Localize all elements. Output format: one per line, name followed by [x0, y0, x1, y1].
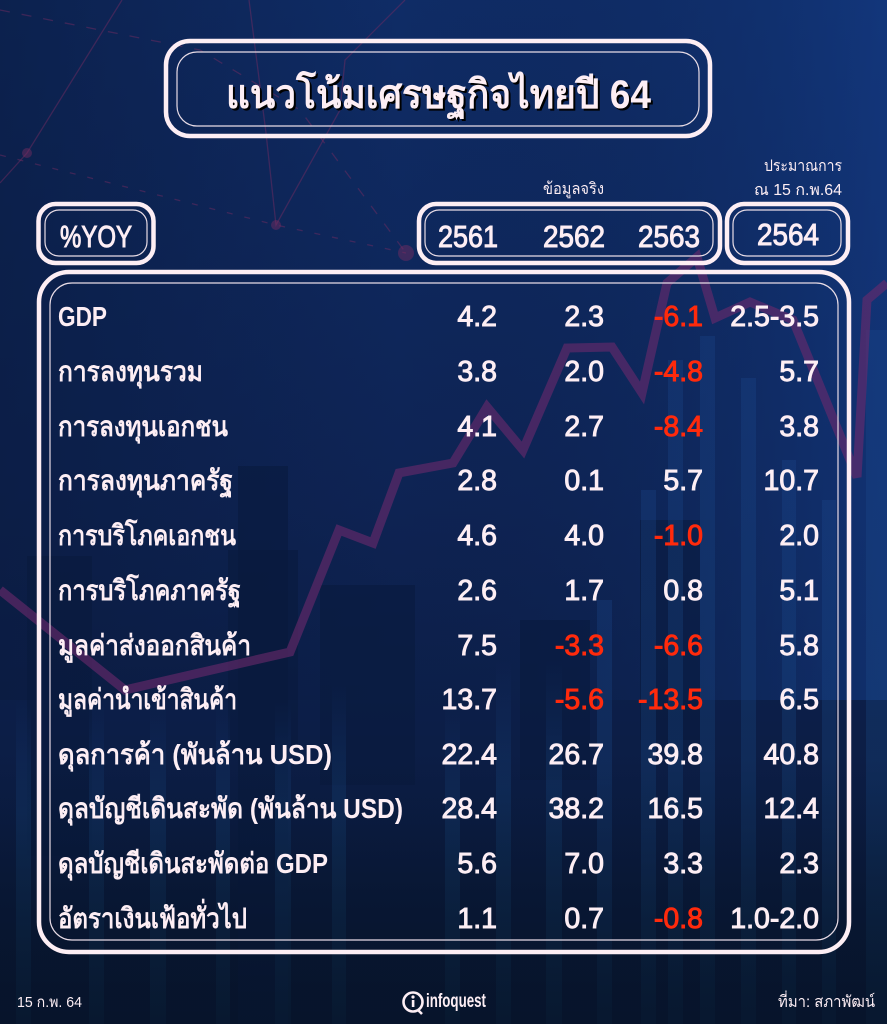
- row: trade balance: 39.8: [648, 739, 703, 771]
- row: GDP: -6.1: [654, 301, 703, 333]
- row: trade balance: ดุลการค้า (พันล้าน USD): [58, 739, 332, 772]
- footer date: 15 ก.พ. 64: [17, 994, 82, 1011]
- row: trade balance: 26.7: [549, 739, 604, 771]
- label: forecast: ประมาณการ: [764, 158, 842, 175]
- row: headline inflation: -0.8: [654, 903, 703, 935]
- row: headline inflation: [58, 898, 819, 935]
- header: forecast year: [727, 204, 848, 263]
- row: private consumption: 4.6: [457, 520, 497, 552]
- title text: แนวโน้มเศรษฐกิจไทยปี 64: [226, 71, 652, 121]
- row: current account to GDP: 3.3: [663, 848, 703, 880]
- row: GDP: 2.3: [564, 301, 604, 333]
- source: ที่มา: สภาพัฒน์: [778, 990, 875, 1011]
- row: public consumption: [58, 573, 819, 609]
- row: GDP: [58, 301, 819, 333]
- row: private investment: 4.1: [457, 411, 497, 443]
- icon: magnifier i: [404, 992, 422, 1014]
- row: total investment: -4.8: [654, 356, 703, 388]
- row: public consumption: 5.1: [779, 575, 819, 607]
- row: private consumption: การบริโภคเอกชน: [58, 518, 236, 551]
- row: private investment: การลงทุนเอกชน: [58, 411, 228, 444]
- row: private consumption: [58, 518, 819, 552]
- row: public investment: การลงทุนภาครัฐ: [58, 465, 233, 499]
- title box: [166, 41, 710, 136]
- row: current account: 16.5: [648, 793, 703, 825]
- header: actual years: [419, 204, 720, 263]
- row: private investment: 3.8: [779, 411, 819, 443]
- row: total investment: 2.0: [564, 356, 604, 388]
- row: trade balance: [58, 739, 819, 772]
- row: exports: -6.6: [654, 630, 703, 662]
- row: public investment: 5.7: [663, 465, 703, 497]
- row: headline inflation: 1.0-2.0: [730, 903, 819, 935]
- row: current account to GDP: 2.3: [779, 848, 819, 880]
- header: actual years: 2561: [438, 219, 498, 254]
- row: public consumption: 2.6: [457, 575, 497, 607]
- header: actual years: 2562: [543, 219, 605, 254]
- row: exports: มูลค่าส่งออกสินค้า: [58, 630, 251, 663]
- row: trade balance: 22.4: [442, 739, 497, 771]
- title box: แนวโน้มเศรษฐกิจไทยปี 64: [228, 73, 654, 123]
- row: current account to GDP: 5.6: [457, 848, 497, 880]
- row: exports: 7.5: [457, 630, 497, 662]
- row: current account: 12.4: [764, 793, 819, 825]
- row: total investment: 3.8: [457, 356, 497, 388]
- panel: data table: [39, 272, 849, 952]
- row: imports: [58, 684, 819, 717]
- row: imports: -5.6: [555, 684, 604, 716]
- row: imports: -13.5: [638, 684, 703, 716]
- row: headline inflation: 0.7: [564, 903, 604, 935]
- row: public consumption: การบริโภคภาครัฐ: [58, 573, 241, 609]
- header: %YOY: [38, 204, 154, 263]
- logo: infoquest: [404, 991, 486, 1014]
- background trend lines: [0, 0, 887, 690]
- row: imports: 6.5: [779, 684, 819, 716]
- row: public investment: [58, 465, 819, 499]
- logo: infoquest: infoquest: [426, 991, 486, 1012]
- background buildings: [27, 466, 700, 1024]
- row: current account to GDP: [58, 848, 819, 881]
- row: headline inflation: 1.1: [457, 903, 497, 935]
- row: imports: 13.7: [442, 684, 497, 716]
- row: exports: 5.8: [779, 630, 819, 662]
- row: GDP: GDP: [58, 301, 107, 332]
- label: actual data: ข้อมูลจริง: [543, 180, 604, 199]
- row: public consumption: 1.7: [564, 575, 604, 607]
- row: total investment: การลงทุนรวม: [58, 356, 203, 389]
- row: exports: -3.3: [555, 630, 604, 662]
- background bars: [16, 660, 562, 1024]
- row: current account: 28.4: [442, 793, 497, 825]
- header: forecast year: 2564: [757, 217, 819, 252]
- row: private investment: [58, 411, 819, 444]
- row: current account to GDP: 7.0: [564, 848, 604, 880]
- row: exports: [58, 630, 819, 663]
- row: current account to GDP: ดุลบัญชีเดินสะพัดต่อ GDP: [58, 848, 328, 881]
- row: private investment: 2.7: [564, 411, 604, 443]
- row: private consumption: -1.0: [654, 520, 703, 552]
- row: current account: [58, 793, 819, 826]
- row: trade balance: 40.8: [764, 739, 819, 771]
- row: GDP: 4.2: [457, 301, 497, 333]
- row: public investment: 10.7: [764, 465, 819, 497]
- row: headline inflation: อัตราเงินเฟ้อทั่วไป: [58, 898, 247, 934]
- row: private investment: -8.4: [654, 411, 703, 443]
- header: %YOY: %YOY: [60, 219, 132, 254]
- row: public consumption: 0.8: [663, 575, 703, 607]
- row: private consumption: 4.0: [564, 520, 604, 552]
- row: total investment: [58, 356, 819, 389]
- label: forecast: ณ 15 ก.พ.64: [754, 182, 842, 199]
- row: private consumption: 2.0: [779, 520, 819, 552]
- row: total investment: 5.7: [779, 356, 819, 388]
- row: current account: 38.2: [549, 793, 604, 825]
- header: actual years: 2563: [638, 219, 700, 254]
- label: forecast: [754, 158, 842, 199]
- row: GDP: 2.5-3.5: [730, 301, 819, 333]
- row: imports: มูลค่านำเข้าสินค้า: [58, 684, 237, 717]
- row: public investment: 0.1: [564, 465, 604, 497]
- row: public investment: 2.8: [457, 465, 497, 497]
- row: current account: ดุลบัญชีเดินสะพัด (พันล้าน USD): [58, 793, 403, 826]
